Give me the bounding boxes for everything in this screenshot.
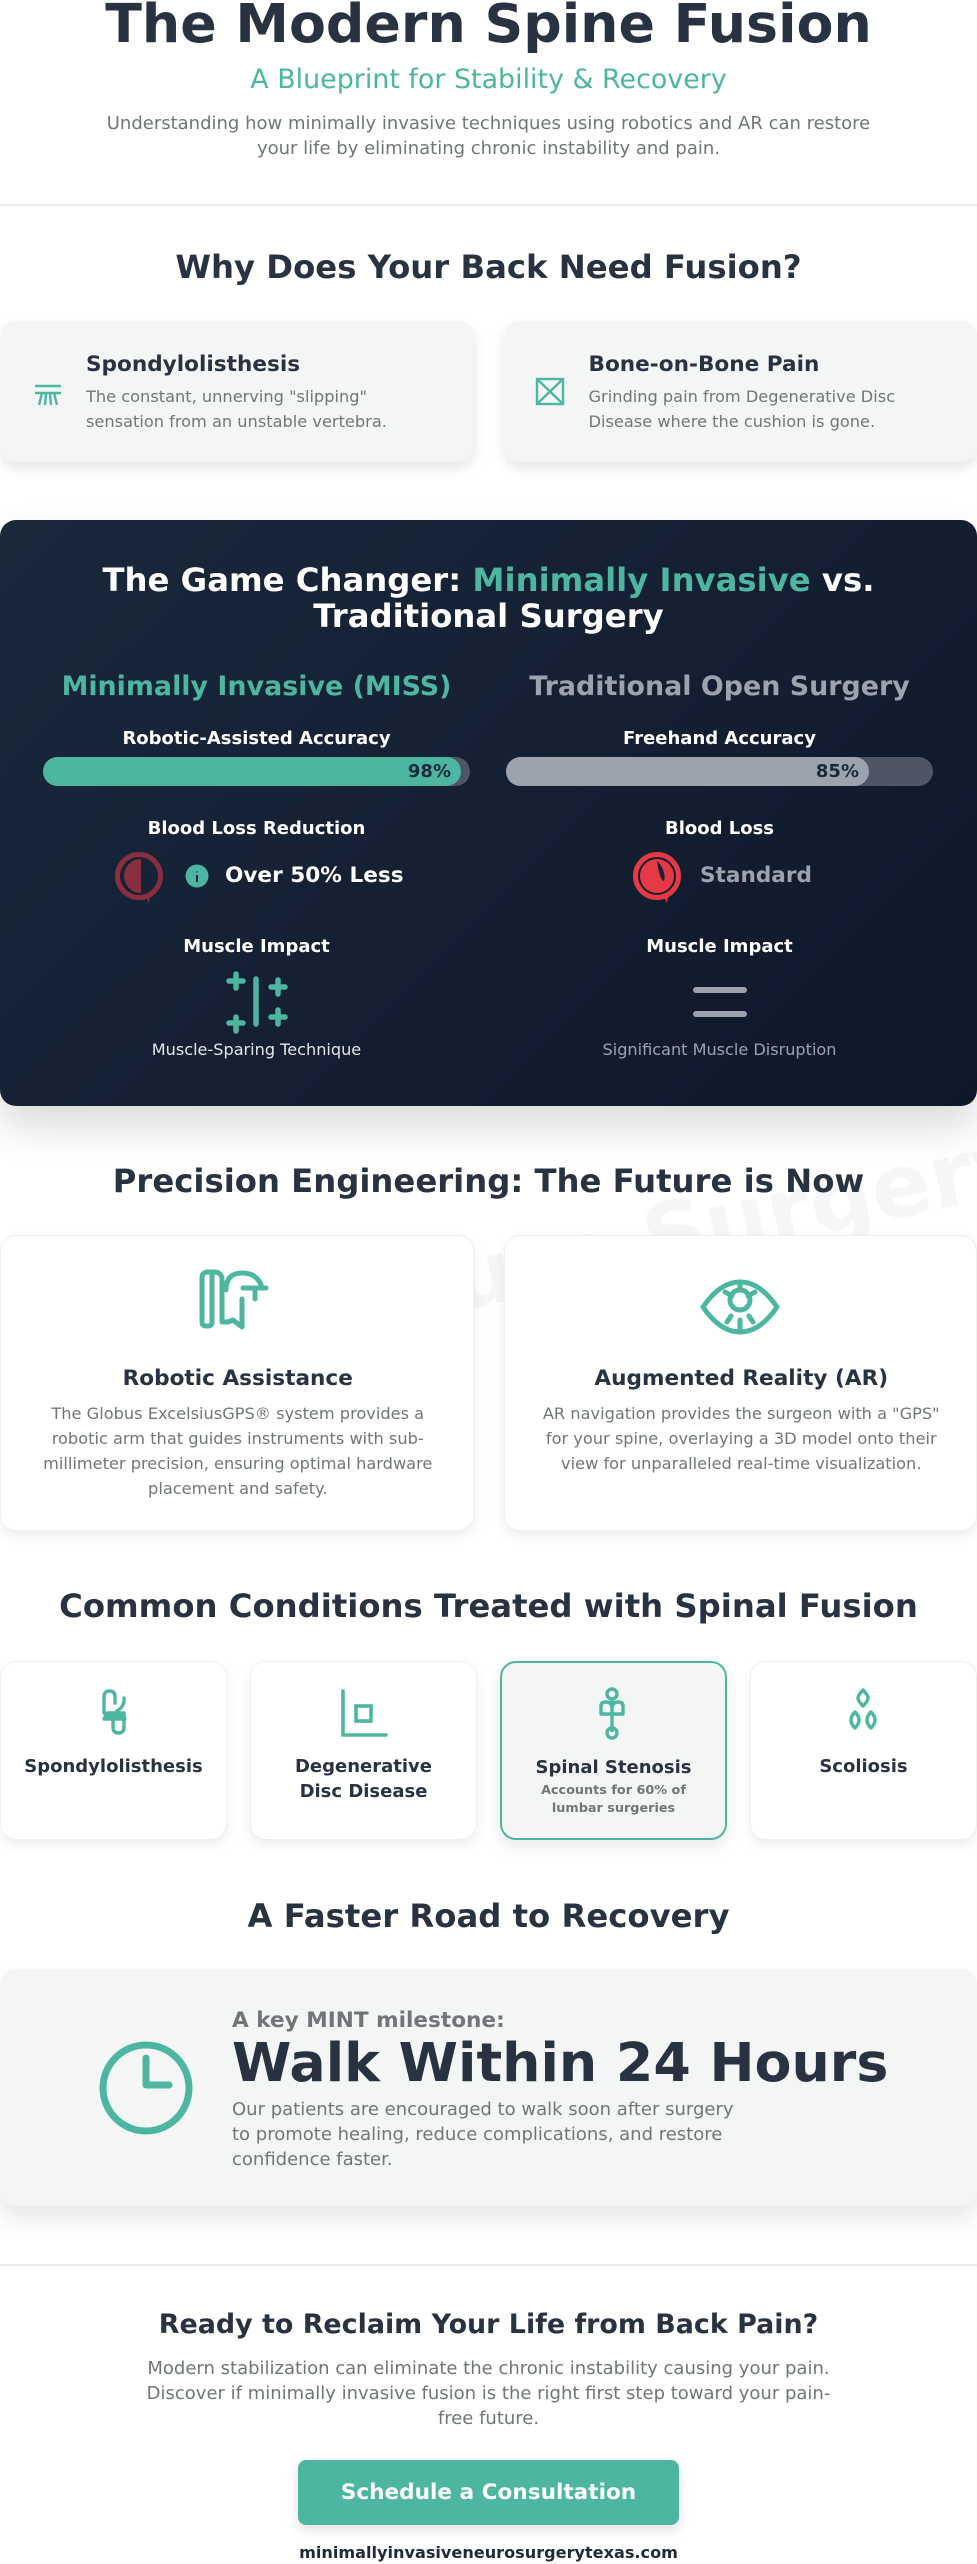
icon: narrowed canal — [599, 1687, 625, 1740]
card text: The Globus ExcelsiusGPS® system provides a — [51, 1404, 424, 1423]
CTA heading: Ready to Reclaim Your Life from Back Pain? — [159, 2309, 818, 2340]
comparison heading — [102, 561, 874, 634]
panel: recovery milestone — [0, 1969, 977, 2206]
card text — [543, 1404, 940, 1473]
column heading: traditional: Traditional Open Surgery — [529, 670, 910, 702]
card text: AR navigation provides the surgeon with a "GPS" — [543, 1404, 940, 1423]
text: muscle disruption: Significant Muscle Disruption — [603, 1040, 836, 1059]
condition label — [295, 1756, 432, 1802]
card text: Grinding pain from Degenerative Disc — [588, 387, 895, 406]
label: muscle impact left: Muscle Impact — [183, 936, 330, 957]
card text: view for unparalleled real-time visualization. — [561, 1454, 921, 1473]
intro text: Understanding how minimally invasive techniques using robotics and AR can restore — [107, 113, 870, 134]
card title: Robotic Assistance — [123, 1366, 353, 1391]
CTA text: free future. — [438, 2408, 539, 2429]
condition note: Accounts for 60% of — [541, 1782, 686, 1798]
card text — [86, 387, 387, 431]
bar: freehand 85% — [506, 757, 933, 786]
card text: millimeter precision, ensuring optimal hardware — [43, 1454, 432, 1473]
label: blood loss reduction: Blood Loss Reduction — [148, 818, 365, 839]
icon: small teal drop — [186, 864, 208, 888]
CTA text — [147, 2358, 830, 2429]
header — [105, 0, 872, 159]
milestone text: to promote healing, reduce complications, and restore — [232, 2124, 722, 2144]
CTA text: Modern stabilization can eliminate the chronic instability causing your pain. — [147, 2358, 830, 2379]
condition label: Scoliosis — [819, 1756, 908, 1776]
label: muscle impact right: Muscle Impact — [646, 936, 793, 957]
card text — [588, 387, 895, 431]
condition label: Disc Disease — [300, 1780, 427, 1802]
panel: condition degenerative disc disease — [250, 1661, 477, 1840]
icon: clock — [100, 2042, 192, 2134]
milestone headline: Walk Within 24 Hours — [232, 2031, 888, 2094]
card text: sensation from an unstable vertebra. — [86, 412, 387, 431]
icon: slipped links — [102, 1689, 127, 1735]
label: freehand accuracy: Freehand Accuracy — [623, 728, 816, 749]
milestone text — [232, 2098, 734, 2170]
condition label: Spondylolisthesis — [24, 1756, 203, 1776]
icon: robotic arm — [200, 1270, 268, 1330]
call to action — [147, 2309, 830, 2562]
bar: robotic 98% — [43, 757, 470, 786]
comparison heading: Traditional Surgery — [313, 596, 664, 634]
milestone text: Our patients are encouraged to walk soon after surgery — [232, 2098, 734, 2120]
condition label: Degenerative — [295, 1756, 432, 1776]
milestone text: confidence faster. — [232, 2148, 393, 2170]
CTA text: Discover if minimally invasive fusion is the right first step toward your pain- — [147, 2383, 830, 2404]
icon: three drops — [849, 1688, 877, 1730]
stat: over 50 percent less: Over 50% Less — [225, 862, 404, 888]
icon: muscle disruption — [693, 987, 747, 1017]
bar: robotic 98%: 98% — [408, 761, 451, 782]
condition note: lumbar surgeries — [552, 1800, 675, 1816]
panel: spondylolisthesis — [0, 321, 474, 462]
panel: comparison — [0, 520, 977, 1106]
comparison heading: The Game Changer: Minimally Invasive vs. — [103, 561, 874, 599]
heading: why fusion: Why Does Your Back Need Fusion? — [175, 248, 802, 286]
card title: Augmented Reality (AR) — [594, 1366, 888, 1391]
icon: slipping vertebra — [35, 384, 61, 406]
intro text: your life by eliminating chronic instability and pain. — [257, 138, 720, 159]
condition label: Spinal Stenosis — [536, 1756, 691, 1778]
stat: standard: Standard — [700, 862, 812, 888]
heading: common conditions: Common Conditions Treated with Spinal Fusion — [59, 1587, 918, 1625]
card title: Spondylolisthesis — [86, 352, 300, 376]
intro text — [107, 113, 870, 159]
icon: dim blood drop gauge — [115, 852, 163, 903]
milestone label: A key MINT milestone: — [232, 2008, 505, 2033]
button: Schedule a Consultation — [341, 2480, 636, 2505]
panel: augmented reality — [504, 1235, 977, 1531]
icon: disc in axes — [341, 1689, 388, 1737]
card text — [43, 1404, 432, 1498]
website url: minimallyinvasiveneurosurgerytexas.com — [299, 2542, 678, 2562]
panel: condition scoliosis — [750, 1661, 977, 1840]
subtitle: A Blueprint for Stability & Recovery — [250, 64, 727, 95]
card title: Bone-on-Bone Pain — [588, 352, 819, 376]
bar: freehand 85%: 85% — [816, 761, 859, 782]
card text: robotic arm that guides instruments with sub- — [52, 1429, 424, 1448]
button — [298, 2460, 679, 2525]
icon: muscle sparing — [226, 971, 288, 1034]
card text: Disease where the cushion is gone. — [588, 412, 875, 431]
label: robotic accuracy: Robotic-Assisted Accuracy — [122, 728, 391, 749]
heading: precision engineering: Precision Engineering: The Future is Now — [113, 1162, 864, 1200]
column heading: MISS: Minimally Invasive (MISS) — [62, 670, 451, 702]
icon: bright blood drop gauge — [633, 852, 681, 903]
card text: for your spine, overlaying a 3D model onto their — [546, 1429, 937, 1448]
card text: The constant, unnerving "slipping" — [86, 387, 367, 406]
icon: crossed box — [536, 378, 564, 406]
panel: condition spondylolisthesis — [0, 1661, 227, 1840]
icon: AR eye — [700, 1280, 780, 1334]
card text: placement and safety. — [148, 1479, 327, 1498]
condition note — [541, 1782, 686, 1816]
label: blood loss: Blood Loss — [665, 818, 774, 839]
panel: robotic assistance — [0, 1235, 474, 1531]
heading: recovery: A Faster Road to Recovery — [247, 1897, 730, 1935]
panel: condition spinal stenosis — [500, 1661, 727, 1840]
panel: bone-on-bone pain — [504, 321, 977, 462]
text: muscle sparing: Muscle-Sparing Technique — [152, 1040, 361, 1059]
